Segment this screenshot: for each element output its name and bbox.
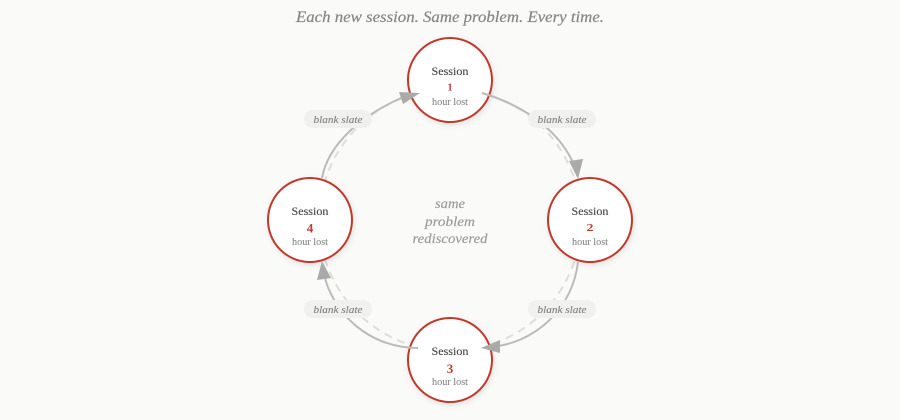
label: blank slate bottom right [528,300,596,318]
session 2 node: Session [572,204,608,218]
label: blank slate top left [304,110,372,128]
label: blank slate bottom left: blank slate [314,304,363,316]
title: Each new session. Same problem. Every time. [295,9,604,26]
session 4 node: Session [292,204,328,218]
center caption: problem [424,215,475,230]
session 3 node [408,318,492,402]
arrow: session 3 to 4 [317,261,418,348]
session 1 node: hour lost [432,97,468,108]
dashed inner loop [319,89,581,351]
arrow: session 1 to 2 [482,93,583,179]
label: blank slate top right: blank slate [538,114,587,126]
label: blank slate bottom left [304,300,372,318]
center caption: rediscovered [412,232,489,247]
session 4 node [268,178,352,262]
arrow: session 4 to 1 [322,92,420,178]
session 1 node: Session [432,64,468,78]
session 3 node: Session [432,344,468,358]
center caption [412,197,489,247]
session 2 node: hour lost [572,237,608,248]
session 2 node [548,178,632,262]
session 2 node: 2 [586,222,594,234]
center caption: same [435,197,465,212]
session 1 node: 1 [448,82,452,94]
session 4 node: 4 [307,220,314,236]
session 3 node: hour lost [432,377,468,388]
label: blank slate top right [528,110,596,128]
label: blank slate bottom right: blank slate [538,304,587,316]
session 4 node: hour lost [292,237,328,248]
session 1 node [408,38,492,122]
label: blank slate top left: blank slate [314,114,363,126]
session 3 node: 3 [447,361,454,376]
arrow: session 2 to 3 [481,262,578,353]
